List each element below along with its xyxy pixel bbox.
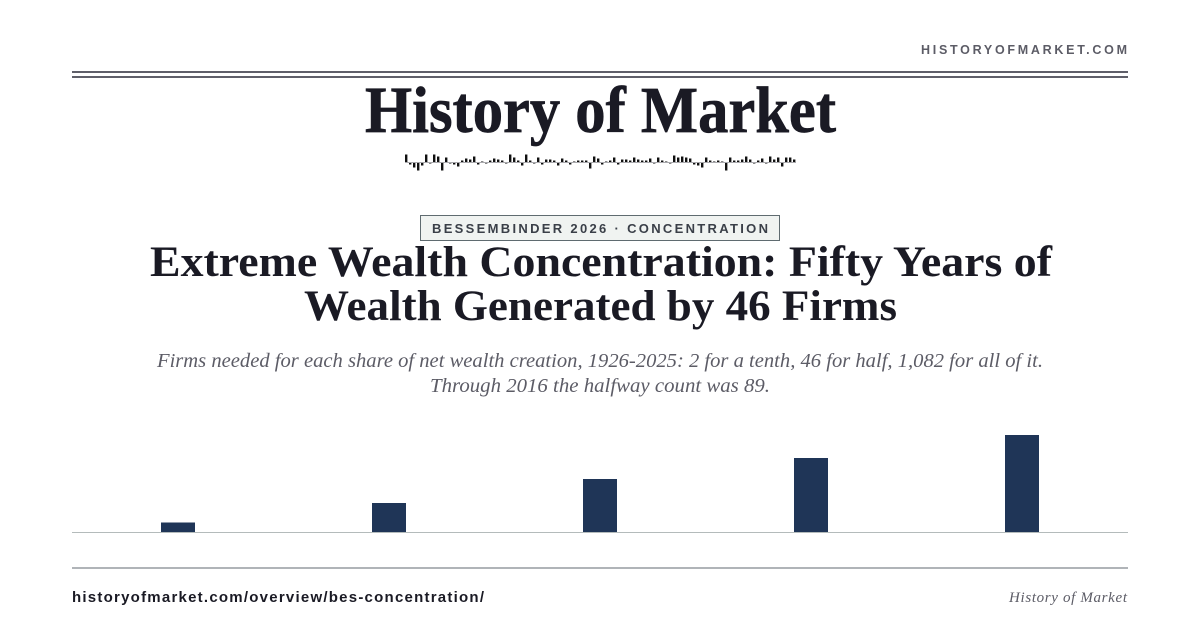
- sparkline: decorative bar strip: [405, 154, 796, 170]
- headline: Wealth Generated by 46 Firms: [304, 283, 897, 330]
- footer rule: [72, 567, 1128, 569]
- subtitle: Firms needed for each share of net wealth creation, 1926-2025: 2 for a tenth, 46 for half, 1,082 for all of it.: [156, 350, 1043, 372]
- headline: Extreme Wealth Concentration: Fifty Years of: [150, 239, 1053, 286]
- masthead title: History of Market: [365, 74, 836, 147]
- category badge: [420, 216, 780, 240]
- footer url: historyofmarket.com/overview/bes-concentration/: [72, 589, 485, 606]
- subtitle: [156, 350, 1043, 397]
- category badge: BESSEMBINDER 2026 · CONCENTRATION: [432, 221, 768, 236]
- subtitle: Through 2016 the halfway count was 89.: [430, 375, 770, 397]
- bar chart: [72, 435, 1128, 533]
- masthead double rule: [72, 71, 1128, 78]
- site domain label: HISTORYOFMARKET.COM: [921, 43, 1127, 57]
- footer brand: History of Market: [1008, 590, 1128, 606]
- headline: [150, 239, 1053, 330]
